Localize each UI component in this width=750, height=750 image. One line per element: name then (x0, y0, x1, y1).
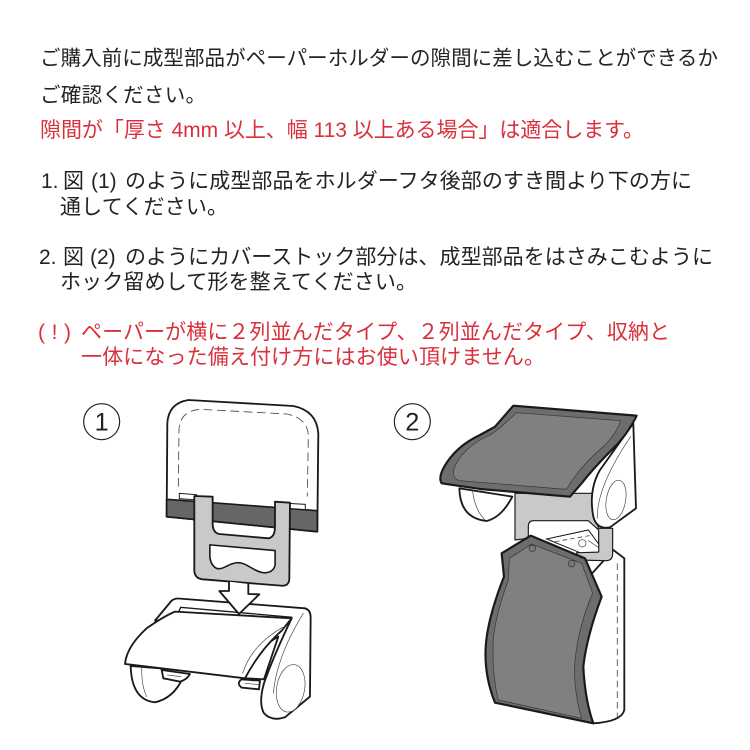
back panel white (547, 550, 624, 723)
left roller (459, 488, 512, 521)
intro text: ご購入前に成型部品がペーパーホルダーの隙間に差し込むことができるか (40, 47, 718, 70)
step 2 text: (2) (90, 246, 116, 269)
step 1 text: 図 (63, 170, 84, 193)
step 1 text: 通してください。 (60, 196, 228, 219)
step 2 text (39, 246, 713, 294)
right arm (592, 423, 636, 528)
step 2 text: ホック留めして形を整えてください。 (60, 271, 417, 294)
intro text (40, 47, 718, 107)
step 1 text (41, 170, 692, 219)
step 2 text: のようにカバーストック部分は、成型部品をはさみこむように (125, 246, 713, 269)
figure 1 (84, 400, 318, 719)
lower cover dark (485, 536, 602, 723)
white hanger gap (210, 545, 275, 573)
red warning (38, 321, 670, 369)
panel dashes (616, 563, 619, 718)
moulded part (194, 496, 290, 586)
step 1 text: (1) (91, 170, 117, 193)
number 1 (84, 404, 120, 440)
number 2: 2 (405, 409, 419, 437)
step 1 text: 1. (41, 170, 59, 193)
red warning: (!) (38, 321, 71, 344)
number 2 (394, 404, 430, 440)
red warning: ペーパーが横に２列並んだタイプ、２列並んだタイプ、収納と (81, 321, 670, 344)
arrow down (219, 582, 259, 614)
step 1 text: のように成型部品をホルダーフタ後部のすき間より下の方に (125, 170, 692, 193)
cover stock flat (167, 400, 318, 532)
step 2 text: 2. (39, 246, 57, 269)
step 2 text: 図 (63, 246, 84, 269)
figure 2 (394, 404, 637, 723)
paper holder (125, 599, 311, 719)
intro text: ご確認ください。 (40, 84, 206, 107)
red size condition: 隙間が「厚さ 4mm 以上、幅 113 以上ある場合」は適合します。 (40, 119, 644, 142)
red warning: 一体になった備え付け方にはお使い頂けません。 (81, 346, 545, 369)
hanger behind cover (515, 493, 613, 561)
number 1: 1 (95, 409, 109, 437)
top cover dark (440, 406, 637, 497)
